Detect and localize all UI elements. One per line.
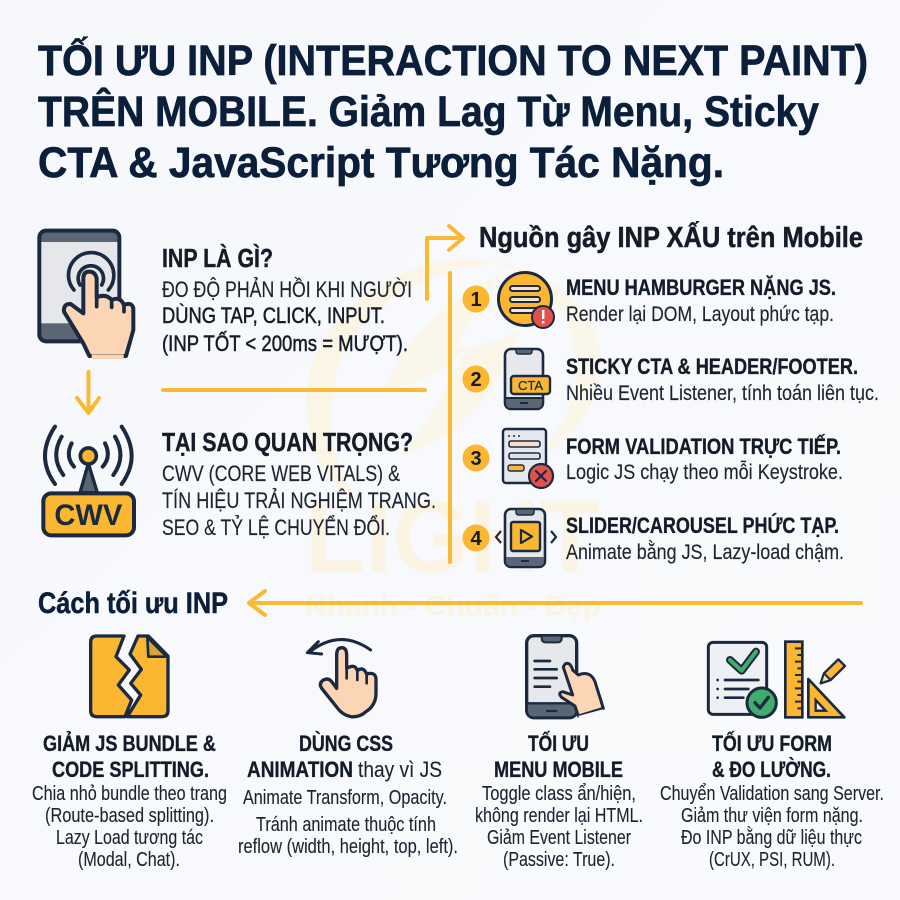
column 3: tối ưu menu mobile: Toggle class ẩn/hiện,: [482, 783, 636, 805]
badge 3: [462, 444, 490, 472]
watermark: LIGHT logo: [305, 260, 601, 621]
icon: split file: [91, 636, 168, 717]
text block: INP là gì: DÙNG TAP, CLICK, INPUT.: [162, 303, 385, 328]
icon: tablet with tapping hand: [39, 231, 133, 359]
column 4: tối ưu form và đo lường: (CrUX, PSI, RUM).: [709, 849, 835, 871]
icon: phone slider: [496, 509, 556, 567]
column 2: dùng CSS animation: DÙNG CSS: [299, 731, 393, 756]
column 1: giảm JS bundle: (Modal, Chat).: [78, 849, 180, 871]
badge 3: 3: [470, 448, 482, 470]
item 4: slider carousel: Animate bằng JS, Lazy-load chậm.: [566, 541, 844, 564]
column 2: dùng CSS animation: thay vì JS: [358, 757, 442, 782]
column 2: dùng CSS animation: ANIMATION: [247, 757, 353, 782]
item 4: slider carousel: SLIDER/CAROUSEL PHỨC TẠP.: [566, 513, 839, 538]
title: CTA & JavaScript Tương Tác Nặng.: [38, 139, 724, 187]
icon: CWV signal antenna: CWV: [54, 499, 122, 532]
arrow: down from tablet to CWV: [77, 372, 99, 413]
column 1: giảm JS bundle: (Route-based splitting).: [45, 805, 214, 827]
title: TRÊN MOBILE. Giảm Lag Từ Menu, Sticky: [38, 87, 819, 136]
column 2: dùng CSS animation: Tránh animate thuộc tính: [256, 814, 436, 836]
column 4: tối ưu form và đo lường: [660, 642, 884, 871]
text block: INP là gì: (INP TỐT < 200ms = MƯỢT).: [162, 330, 408, 356]
text block: tại sao quan trọng: TẠI SAO QUAN TRỌNG?: [162, 427, 413, 457]
icon: phone with hand: [527, 636, 607, 719]
column 1: giảm JS bundle: [32, 636, 227, 871]
column 3: tối ưu menu mobile: MENU MOBILE: [494, 757, 623, 782]
column 1: giảm JS bundle: CODE SPLITTING.: [52, 757, 209, 782]
text block: tại sao quan trọng: SEO & TỶ LỆ CHUYỂN ĐỔI.: [162, 515, 390, 540]
badge 4: [462, 524, 490, 552]
icon: hamburger menu alert: [498, 272, 554, 328]
heading: cách tối ưu INP: Cách tối ưu INP: [38, 587, 228, 620]
column 2: dùng CSS animation: reflow (width, height, top, left).: [238, 836, 458, 858]
text block: INP là gì: [162, 243, 412, 356]
item 3: form validation: [462, 429, 843, 488]
column 3: tối ưu menu mobile: (Passive: True).: [503, 849, 615, 871]
icon: swipe hand: [307, 640, 376, 717]
icon: checklist ruler and pencil: [708, 642, 845, 717]
item 4: slider carousel: [462, 509, 844, 567]
badge 1: 1: [470, 289, 482, 311]
column 3: tối ưu menu mobile: TỐI ƯU: [528, 730, 589, 756]
text block: tại sao quan trọng: [162, 427, 436, 540]
text block: tại sao quan trọng: TÍN HIỆU TRẢI NGHIỆM TRANG.: [162, 488, 436, 513]
vertical list line: [448, 271, 452, 564]
arrow: to INP sources: [427, 226, 463, 299]
item 1: hamburger menu: [462, 272, 836, 328]
column 3: tối ưu menu mobile: không render lại HTML.: [475, 805, 643, 827]
column 2: dùng CSS animation: [238, 640, 458, 858]
text block: INP là gì: ĐO ĐỘ PHẢN HỒI KHI NGƯỜI: [162, 277, 412, 302]
item 3: form validation: Logic JS chạy theo mỗi Keystroke.: [566, 461, 843, 484]
badge 4: 4: [470, 528, 482, 550]
text block: INP là gì: INP LÀ GÌ?: [162, 243, 273, 273]
item 2: sticky CTA: [462, 349, 879, 409]
title: [38, 36, 868, 187]
watermark: LIGHT logo: LIGHT: [305, 479, 600, 594]
column 4: tối ưu form và đo lường: TỐI ƯU FORM: [712, 730, 832, 756]
icon: form with error: [503, 429, 553, 488]
divider line: [161, 388, 427, 392]
column 3: tối ưu menu mobile: [475, 636, 643, 871]
badge 2: 2: [470, 369, 482, 391]
item 1: hamburger menu: MENU HAMBURGER NẶNG JS.: [566, 275, 836, 300]
arrow: to cách tối ưu: [249, 591, 861, 615]
icon: phone with CTA: CTA: [518, 378, 543, 393]
badge 1: [462, 286, 490, 312]
column 3: tối ưu menu mobile: Giảm Event Listener: [487, 827, 631, 849]
column 1: giảm JS bundle: Lazy Load tương tác: [56, 827, 203, 849]
column 2: dùng CSS animation: Animate Transform, Opacity.: [243, 787, 447, 809]
column 4: tối ưu form và đo lường: & ĐO LƯỜNG.: [712, 757, 831, 782]
item 3: form validation: FORM VALIDATION TRỰC TIẾP.: [566, 434, 841, 459]
text block: tại sao quan trọng: CWV (CORE WEB VITALS) &: [162, 461, 400, 486]
icon: CWV signal antenna: [43, 427, 134, 535]
item 1: hamburger menu: Render lại DOM, Layout phức tạp.: [566, 303, 834, 326]
column 1: giảm JS bundle: GIẢM JS BUNDLE &: [43, 731, 216, 756]
column 1: giảm JS bundle: Chia nhỏ bundle theo trang: [32, 783, 227, 805]
watermark: LIGHT logo: Nhanh - Chuẩn - Đẹp: [305, 590, 601, 621]
icon: phone with CTA: [505, 349, 550, 409]
badge 2: [462, 366, 490, 392]
